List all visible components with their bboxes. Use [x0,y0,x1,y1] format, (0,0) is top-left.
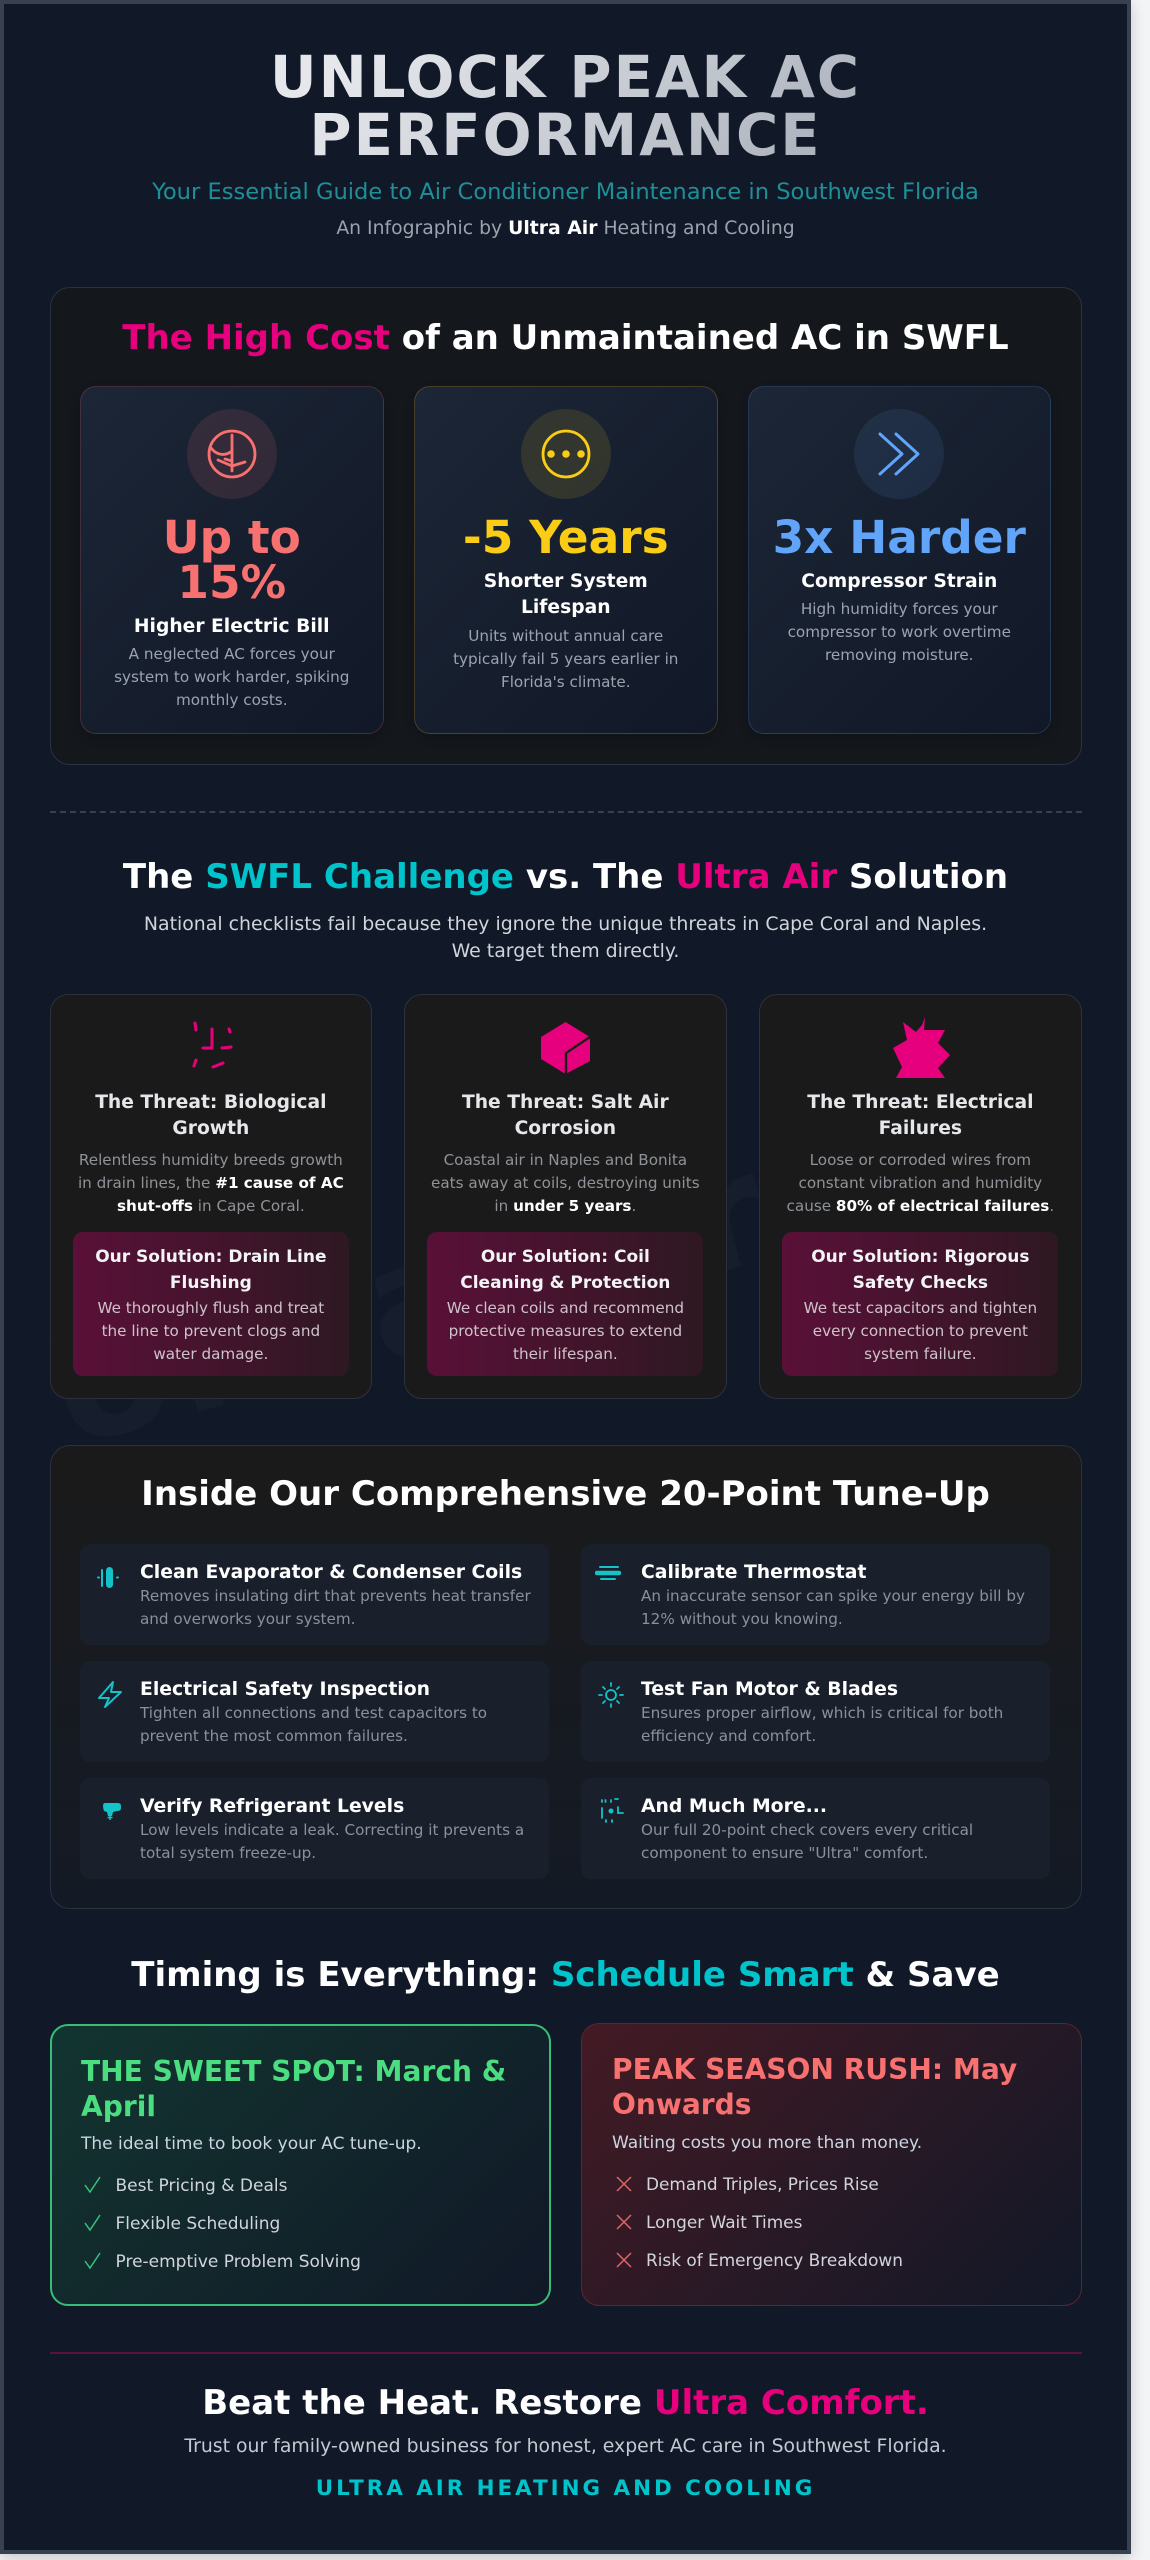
brand: ULTRA AIR HEATING AND COOLING [316,2476,815,2501]
stat card: lifespan [414,386,718,734]
solution text: every connection to prevent [813,1322,1028,1340]
item text: 12% without you knowing. [641,1610,843,1628]
item text [641,1704,1003,1745]
item title: Verify Refrigerant Levels [140,1796,404,1816]
threat card: biological growth [50,994,372,1399]
item text: efficiency and comfort. [641,1727,816,1745]
item text: total system freeze-up. [140,1844,316,1862]
icon: refrigerant [103,1803,121,1820]
solution title [460,1247,670,1293]
card heading [612,2053,1017,2120]
solution title: Our Solution: Rigorous Safety Checks [811,1247,1029,1293]
heading: challenge: The SWFL Challenge vs. The Ultra Air Solution [123,857,1008,897]
solution box [782,1232,1058,1376]
card: peak season [581,2023,1082,2306]
icon: cross [616,2252,632,2268]
icon: lightning bolt [98,1681,122,1708]
heading: tune-up: Inside Our Comprehensive 20-Point Tune-Up [141,1474,990,1514]
threat card: electrical failures [759,994,1082,1399]
stat description: A neglected AC forces your system to work harder, spiking monthly costs. [114,645,349,709]
item text [140,1821,524,1862]
subtitle: Your Essential Guide to Air Conditioner Maintenance in Southwest Florida [152,179,979,205]
item: thermostat [581,1544,1050,1645]
icon: thermostat bars [595,1566,622,1580]
icon: clock dots [521,409,611,499]
stat label: Compressor Strain [801,570,997,592]
threat text: Loose or corroded wires from constant vibration and humidity cause 80% of electrical failures. [787,1151,1054,1215]
icon: burst [893,1017,950,1078]
byline: An Infographic by Ultra Air Heating and Cooling [336,218,795,238]
solution box [73,1232,349,1376]
item text [641,1587,1025,1628]
item: electrical [80,1661,549,1762]
icon: dotted scan [601,1798,624,1823]
item title: Electrical Safety Inspection [140,1678,430,1700]
item text: Low levels indicate a leak. Correcting it prevents a [140,1821,524,1839]
stat number: -5 Years [463,511,669,564]
icon: cross [616,2176,632,2192]
item text: Ensures proper airflow, which is critical for both [641,1704,1003,1722]
closing text: Trust our family-owned business for honest, expert AC care in Southwest Florida. [184,2436,947,2457]
solution text [804,1299,1037,1363]
stat label: Shorter System Lifespan [484,570,648,618]
item text: prevent the most common failures. [140,1727,408,1745]
item text: Our full 20-point check covers every critical [641,1821,973,1839]
item title: And Much More... [641,1796,827,1816]
threat text: Relentless humidity breeds growth in drain lines, the #1 cause of AC shut-offs in Cape Coral. [78,1151,344,1215]
solution text: We test capacitors and tighten [804,1299,1037,1317]
icon: cube [541,1022,590,1074]
item title: Test Fan Motor & Blades [641,1678,898,1700]
stat number: Up to 15% [163,511,301,609]
item title: Clean Evaporator & Condenser Coils [140,1562,522,1582]
card: sweet spot [50,2024,551,2306]
solution title: Our Solution: Coil [481,1247,650,1267]
list item: Flexible Scheduling [116,2214,280,2234]
threat text: Coastal air in Naples and Bonita eats away at coils, destroying units in under 5 years. [431,1151,700,1215]
item text: and overworks your system. [140,1610,355,1628]
closing heading: Beat the Heat. Restore Ultra Comfort. [202,2383,929,2423]
list item: Demand Triples, Prices Rise [646,2174,879,2194]
item text: Tighten all connections and test capacitors to [140,1704,487,1722]
solution box [427,1232,703,1376]
threat title: The Threat: Electrical Failures [807,1092,1033,1139]
solution text: We thoroughly flush and treat [97,1299,324,1317]
intro text [144,913,987,962]
item text: Removes insulating dirt that prevents heat transfer [140,1587,531,1605]
item: refrigerant [80,1778,549,1879]
solution title: Our Solution: Drain Line Flushing [95,1247,326,1293]
divider [50,811,1082,813]
item text [641,1821,973,1862]
card heading: THE SWEET SPOT: March & [81,2055,506,2088]
solution text: the line to prevent clogs and [102,1322,320,1340]
intro text: We target them directly. [452,940,679,962]
list item: Best Pricing & Deals [116,2176,287,2196]
card heading: PEAK SEASON RUSH: May [612,2053,1017,2086]
card heading [81,2055,506,2122]
solution text: system failure. [864,1345,977,1363]
main title: UNLOCK PEAK AC PERFORMANCE [270,44,861,169]
solution text: We clean coils and recommend [447,1299,684,1317]
divider [50,2352,1082,2354]
stat card: compressor [748,386,1051,734]
header [152,44,979,238]
stat card: electric bill [80,386,384,734]
item: more [581,1778,1050,1879]
threat card: salt air corrosion [404,994,727,1399]
watermark: Ultra Air [27,1118,786,1484]
solution text [97,1299,324,1363]
stat description: Units without annual care typically fail 5 years earlier in Florida's climate. [453,627,678,691]
icon: check [84,2214,100,2232]
stat number: 3x Harder [773,511,1026,564]
icon: bill arrow [187,409,277,499]
heading: timing: Timing is Everything: Schedule Smart & Save [131,1955,1000,1995]
solution text: water damage. [153,1345,268,1363]
icon: growth fragments [192,1022,232,1068]
item: fan [581,1661,1050,1762]
list item: Pre-emptive Problem Solving [116,2252,361,2272]
item text: component to ensure "Ultra" comfort. [641,1844,928,1862]
card heading: Onwards [612,2088,751,2120]
solution text: protective measures to extend [449,1322,682,1340]
card subtext: Waiting costs you more than money. [612,2133,922,2153]
intro text: National checklists fail because they ignore the unique threats in Cape Coral and Naples. [144,913,987,935]
panel: tune-up [50,1445,1082,1909]
item text: An inaccurate sensor can spike your energy bill by [641,1587,1025,1605]
panel: high cost [50,287,1082,765]
icon: cross [616,2214,632,2230]
threat title: The Threat: Salt Air Corrosion [462,1092,669,1139]
heading: high cost: The High Cost of an Unmaintained AC in SWFL [122,318,1009,358]
icon: chevrons [854,409,944,499]
solution title: Cleaning & Protection [460,1273,670,1293]
card heading: April [81,2090,156,2122]
icon: check [84,2176,100,2194]
card subtext: The ideal time to book your AC tune-up. [81,2134,422,2154]
item: coils [80,1544,549,1645]
list item: Risk of Emergency Breakdown [646,2250,903,2270]
icon: check [84,2252,100,2270]
solution text: their lifespan. [513,1345,618,1363]
item text [140,1704,487,1745]
icon: coil [97,1567,119,1588]
stat label: Higher Electric Bill [134,616,330,636]
icon: fan sun [598,1682,624,1708]
threat title: The Threat: Biological Growth [95,1092,326,1139]
stat description: High humidity forces your compressor to work overtime removing moisture. [788,600,1011,664]
solution text [447,1299,684,1363]
item text [140,1587,531,1628]
list item: Longer Wait Times [646,2212,802,2232]
item title: Calibrate Thermostat [641,1562,866,1582]
